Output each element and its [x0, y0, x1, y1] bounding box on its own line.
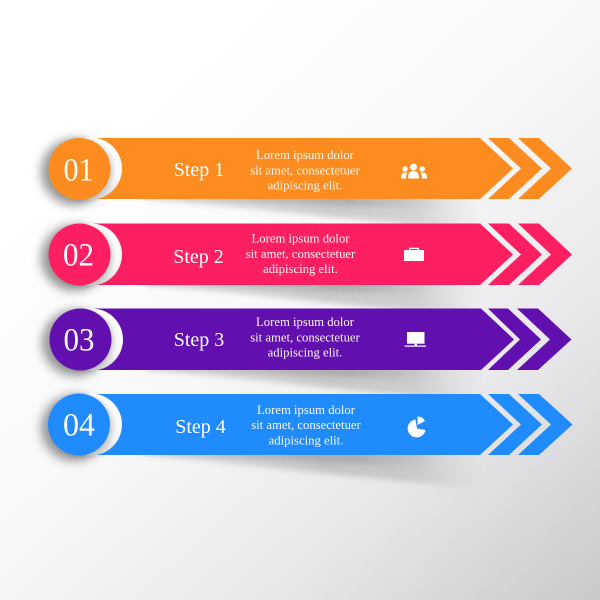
chevron 2 [518, 224, 572, 285]
number badge [48, 138, 113, 201]
number badge [50, 308, 114, 372]
icon: briefcase [404, 248, 424, 261]
body text: Lorem ipsum dolor [256, 148, 355, 162]
crescent [61, 308, 123, 370]
icon: pie chart [408, 416, 426, 437]
step label: Step 2 [173, 246, 224, 268]
number badge: 01 [64, 152, 94, 188]
panel: step 1 [41, 138, 572, 231]
chevron 2 [517, 308, 572, 370]
icon: people [401, 164, 427, 178]
body text: adipiscing elit. [269, 433, 343, 447]
body text: adipiscing elit. [268, 346, 342, 360]
ribbon arrow [90, 224, 513, 285]
number badge: 03 [64, 322, 94, 358]
body text: sit amet, consectetuer [246, 247, 356, 261]
icon: monitor [405, 332, 426, 347]
body text: sit amet, consectetuer [251, 418, 362, 432]
chevron 1 [488, 308, 541, 370]
body text: Lorem ipsum dolor [252, 232, 350, 246]
number badge [48, 224, 113, 287]
chevron 2 [518, 394, 572, 455]
panel: step 2 [41, 224, 572, 317]
crescent [60, 394, 122, 456]
panel: step 4 [41, 394, 572, 489]
crescent [60, 138, 122, 200]
chevron 2 [518, 138, 572, 199]
panel: step 3 [42, 308, 572, 402]
step label: Step 4 [175, 416, 226, 438]
crescent [60, 224, 122, 286]
step label: Step 3 [174, 329, 224, 351]
body text: sit amet, consectetuer [250, 164, 361, 178]
number badge [48, 394, 113, 457]
chevron 1 [488, 224, 542, 285]
ribbon arrow [90, 308, 514, 370]
body text: Lorem ipsum dolor [257, 403, 356, 417]
chevron 1 [488, 138, 542, 199]
chevron 1 [488, 394, 542, 455]
body text: adipiscing elit. [263, 262, 338, 276]
body text: adipiscing elit. [268, 179, 342, 193]
body text: Lorem ipsum dolor [256, 315, 355, 329]
body text: sit amet, consectetuer [250, 330, 361, 344]
ribbon arrow [90, 394, 513, 455]
ribbon arrow [90, 138, 513, 199]
number badge: 02 [63, 238, 94, 274]
step label: Step 1 [174, 159, 224, 181]
number badge: 04 [63, 408, 95, 444]
